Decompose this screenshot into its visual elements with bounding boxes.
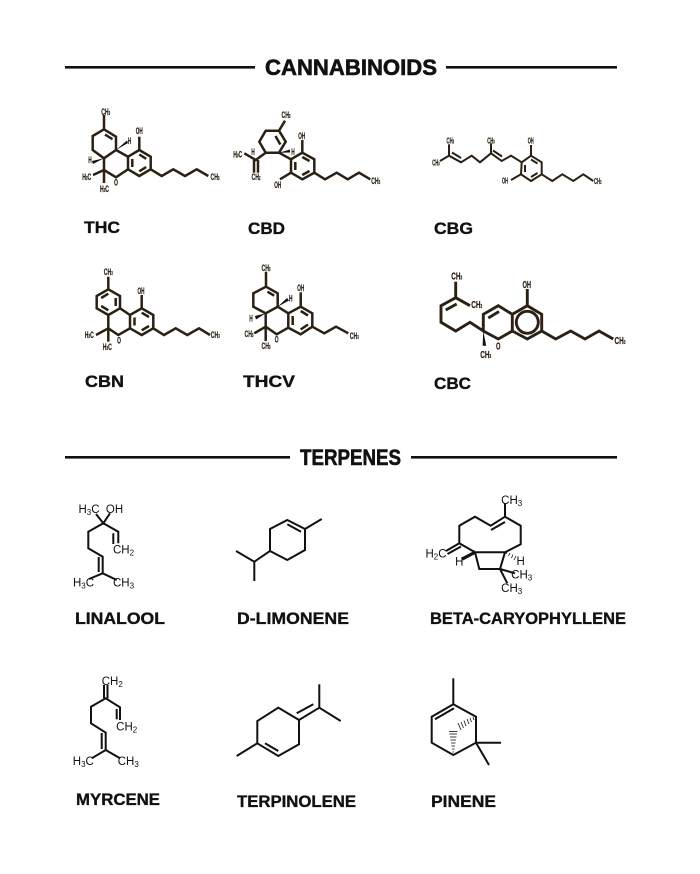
label: CBC: CBC xyxy=(434,374,471,393)
molecule: beta-caryophyllene: 3 xyxy=(528,574,533,582)
molecule: pinene xyxy=(432,678,501,765)
molecule: CBC: OH xyxy=(522,279,531,291)
label: d-limonene: D-LIMONENE xyxy=(237,609,349,628)
molecule: linalool: 3 xyxy=(87,508,92,517)
label: THC: THC xyxy=(84,218,120,237)
molecule: CBD: H xyxy=(291,147,295,157)
molecule: CBD: CH2 xyxy=(252,172,261,182)
heading: cannabinoids: CANNABINOIDS xyxy=(265,55,437,80)
molecule: CBN: O xyxy=(117,335,121,345)
molecule: CBC: CH3 xyxy=(471,299,482,311)
molecule: beta-caryophyllene: 2 xyxy=(434,552,439,562)
molecule: THC: H3C xyxy=(82,172,91,182)
molecule: CBN: H3C xyxy=(103,342,112,352)
molecule: myrcene: CH xyxy=(118,756,134,768)
molecule: CBD: CH3 xyxy=(371,176,380,186)
molecule: beta-caryophyllene: 3 xyxy=(518,499,523,508)
molecule: CBC xyxy=(441,270,626,361)
molecule: beta-caryophyllene: H xyxy=(455,556,463,568)
molecule: linalool: 3 xyxy=(81,582,86,590)
molecule: CBD xyxy=(233,110,380,190)
molecule: linalool: C xyxy=(91,504,100,516)
molecule: CBG: CH3 xyxy=(487,136,495,146)
molecule: CBG: CH3 xyxy=(594,177,602,186)
molecule: terpinolene xyxy=(237,684,341,756)
molecule: myrcene: 3 xyxy=(134,760,139,769)
molecule: linalool: 2 xyxy=(130,548,135,558)
molecule: CBN: H3C xyxy=(85,330,94,340)
molecule: CBG: CH3 xyxy=(432,158,440,168)
label: CBG: CBG xyxy=(434,219,473,238)
molecule: beta-caryophyllene: CH xyxy=(501,583,518,595)
molecule: CBN xyxy=(85,267,220,352)
molecule: CBG xyxy=(432,136,602,186)
molecule: beta-caryophyllene xyxy=(425,495,533,596)
molecule: beta-caryophyllene: C xyxy=(438,548,447,560)
molecule: THCV: H xyxy=(249,314,253,324)
molecule: THCV: CH3 xyxy=(262,263,271,273)
molecule: THCV xyxy=(244,263,359,351)
molecule: THCV: CH3 xyxy=(244,329,254,339)
molecule: CBG: OH xyxy=(502,176,508,186)
molecule: THCV: CH3 xyxy=(350,331,359,341)
label: linalool: LINALOOL xyxy=(75,609,165,628)
molecule: THC: H3C xyxy=(100,184,109,194)
molecule: myrcene: C xyxy=(86,756,94,768)
molecule: CBG: OH xyxy=(528,136,534,146)
label: CBN: CBN xyxy=(85,372,124,391)
molecule: THCV: CH3 xyxy=(262,341,271,351)
label: myrcene: MYRCENE xyxy=(76,790,160,809)
label: THCV: THCV xyxy=(243,372,296,391)
molecule: THCV: O xyxy=(275,334,279,344)
molecule: beta-caryophyllene: 3 xyxy=(518,587,523,596)
label: CBD: CBD xyxy=(248,219,285,238)
molecule: beta-caryophyllene: CH xyxy=(511,570,528,582)
molecule: myrcene: CH xyxy=(116,722,133,734)
molecule: CBN: CH3 xyxy=(211,330,220,340)
molecule: myrcene: 3 xyxy=(81,760,86,769)
label: pinene: PINENE xyxy=(431,792,496,811)
molecule: THCV: H xyxy=(289,294,292,304)
molecule: linalool: C xyxy=(86,578,94,590)
molecule: CBN: OH xyxy=(138,286,144,296)
molecule: myrcene: 2 xyxy=(118,680,123,689)
molecule: THC: OH xyxy=(136,126,143,136)
molecule: THC xyxy=(82,107,220,194)
molecule: d-limonene xyxy=(236,519,322,581)
molecule: CBC: CH3 xyxy=(451,270,462,282)
molecule: CBD: CH3 xyxy=(282,110,291,120)
heading: terpenes: TERPENES xyxy=(300,445,401,470)
molecule: CBD: OH xyxy=(298,131,305,141)
molecule: CBD: H xyxy=(251,147,255,157)
molecule: linalool: CH xyxy=(113,578,130,590)
molecule: linalool: H xyxy=(73,578,81,590)
molecule: linalool: 3 xyxy=(130,582,135,590)
molecule: THC: CH3 xyxy=(210,172,220,182)
molecule: beta-caryophyllene: CH xyxy=(501,495,518,507)
molecule: linalool: CH xyxy=(113,544,130,556)
molecule: CBG: CH3 xyxy=(447,136,454,146)
molecule: beta-caryophyllene: H xyxy=(517,556,525,568)
label: beta-caryophyllene: BETA-CARYOPHYLLENE xyxy=(430,609,626,628)
molecule: THC: H xyxy=(88,155,92,165)
label: terpinolene: TERPINOLENE xyxy=(237,792,356,811)
molecule: linalool: OH xyxy=(106,504,123,516)
molecule: THCV: OH xyxy=(297,283,304,293)
molecule: CBD: H3C xyxy=(233,150,242,160)
molecule: beta-caryophyllene: H xyxy=(425,548,434,560)
molecule: CBD: OH xyxy=(274,180,281,190)
molecule: CBC: CH3 xyxy=(614,335,626,347)
molecule: myrcene: 2 xyxy=(133,726,138,734)
molecule: linalool: H xyxy=(78,504,87,516)
molecule: THC: H xyxy=(128,136,131,146)
molecule: CBC: O xyxy=(496,340,501,352)
molecule: myrcene: H xyxy=(73,756,81,768)
molecule: myrcene xyxy=(73,676,139,769)
molecule: THC: O xyxy=(114,178,118,188)
molecule: THC: CH3 xyxy=(101,107,110,117)
molecule: linalool xyxy=(73,504,135,590)
molecule: myrcene: CH xyxy=(102,676,118,688)
molecule: CBN: CH3 xyxy=(104,267,113,277)
molecule: CBC: CH3 xyxy=(480,349,491,361)
